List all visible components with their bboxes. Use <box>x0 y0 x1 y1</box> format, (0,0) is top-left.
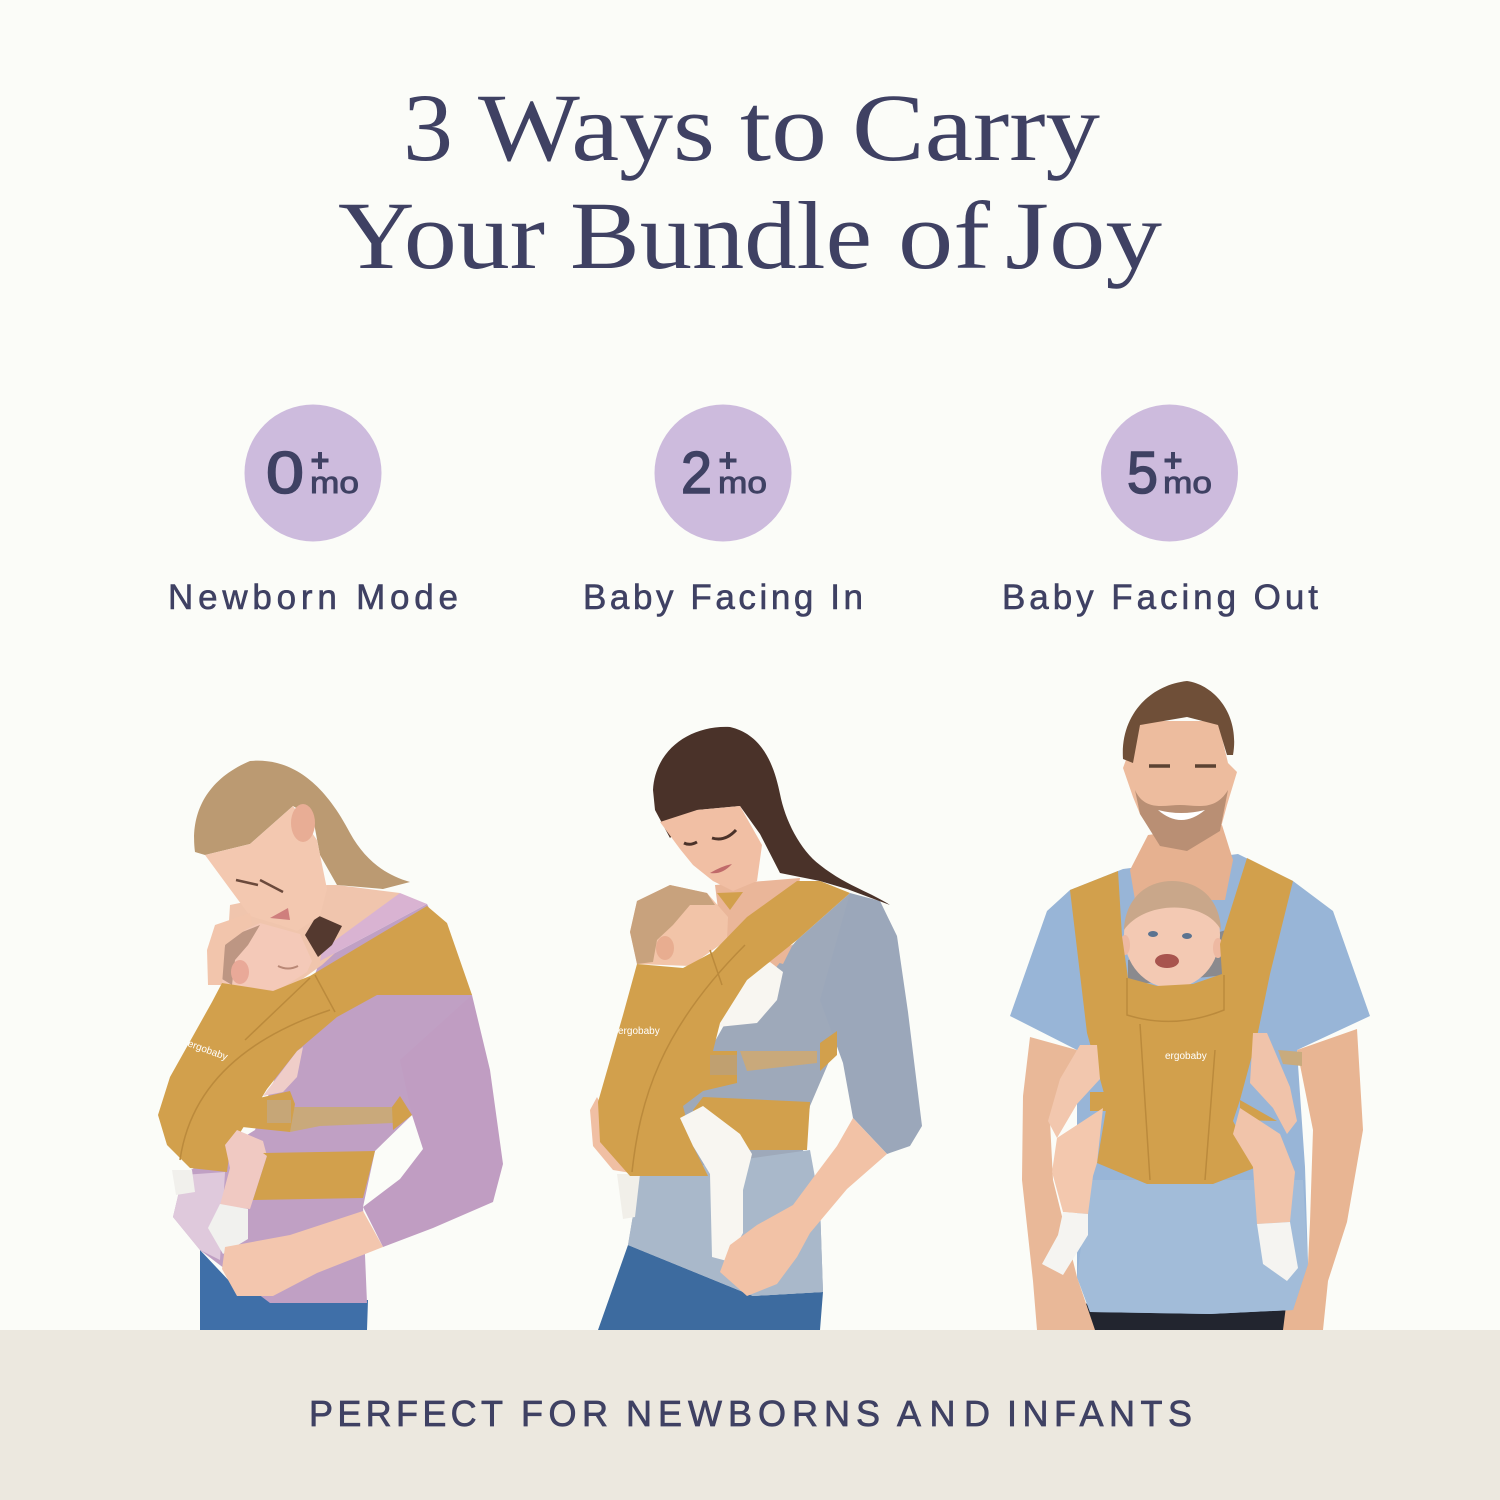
hair <box>653 727 890 905</box>
age badge: 5+ months: mo <box>1163 465 1212 500</box>
carrier logo: ergobaby <box>1165 1051 1207 1062</box>
footer band <box>0 1330 1500 1500</box>
baby's grey suit behind face <box>1128 930 1226 985</box>
carrier logo: ergobaby <box>618 1026 660 1037</box>
photo: mother carrying newborn <box>158 761 503 1330</box>
photo: father carrying baby facing out <box>1010 681 1370 1330</box>
t-shirt <box>1010 854 1370 1314</box>
footer text: AND <box>897 1393 990 1434</box>
label: Baby Facing Out: Baby Facing Out <box>1002 578 1318 617</box>
neck <box>1130 825 1233 900</box>
face <box>205 806 327 931</box>
footer text: FOR <box>521 1393 608 1434</box>
age badge: 0+ months: mo <box>310 465 359 500</box>
title <box>338 74 1162 289</box>
footer text <box>309 1393 1192 1434</box>
hair <box>194 761 410 889</box>
age badge: 2+ months <box>654 404 792 542</box>
baby legs <box>1052 1108 1103 1214</box>
label: Baby Facing In: Baby Facing In <box>583 578 863 617</box>
carrier waist belt <box>253 1151 375 1200</box>
footer text: PERFECT <box>309 1393 503 1434</box>
title: to <box>740 74 827 181</box>
baby white arm and hand <box>718 962 783 1027</box>
age badge: 2+ months: mo <box>718 465 767 500</box>
sweater arm <box>820 893 922 1154</box>
age badge: 0+ months: 0 <box>266 440 304 506</box>
age badge: 0+ months <box>244 404 382 542</box>
stubble <box>1135 790 1228 851</box>
hand on baby's head <box>207 913 252 985</box>
jeans <box>598 1245 823 1330</box>
carrier <box>598 881 850 1176</box>
baby torso <box>263 1047 303 1096</box>
baby far foot <box>617 1174 640 1219</box>
trousers <box>1077 1302 1307 1330</box>
man's hair <box>1123 681 1234 763</box>
strap, buckle and side tab <box>740 1051 817 1071</box>
face <box>660 806 762 891</box>
carrier waist belt <box>693 1097 810 1150</box>
smile <box>1158 810 1205 820</box>
man's eyes <box>1149 764 1216 768</box>
title: of <box>898 182 990 289</box>
carrier <box>1070 858 1293 1184</box>
baby socks <box>1042 1212 1088 1275</box>
title: Ways <box>478 74 715 181</box>
neck and chest <box>715 878 800 975</box>
baby leg and sock <box>220 1130 267 1209</box>
dark hair under chin <box>305 915 342 957</box>
footer text: INFANTS <box>1007 1393 1192 1434</box>
carrier side straps <box>1278 1050 1302 1066</box>
closed eye and lips <box>236 880 283 892</box>
age badge: 5+ months <box>1101 404 1238 542</box>
age badge: 2+ months: 2 <box>681 440 712 506</box>
mother's arm and hand <box>222 1211 383 1296</box>
jeans <box>200 1250 368 1330</box>
mother's supporting hand <box>590 1097 637 1174</box>
baby arms <box>1048 1045 1100 1138</box>
strap, buckle and side tab <box>290 1107 393 1132</box>
baby white leg <box>680 1106 752 1261</box>
ear <box>291 804 315 842</box>
title: Carry <box>852 74 1100 181</box>
age badge: 5+ months: 5 <box>1127 440 1158 506</box>
baby head <box>1124 882 1220 988</box>
carrier logo: ergobaby <box>186 1038 229 1063</box>
title: 3 <box>403 74 453 181</box>
face <box>1123 721 1237 850</box>
sweater torso <box>173 904 472 1303</box>
neck and chest <box>225 885 400 995</box>
carrier <box>158 906 472 1172</box>
title: Your <box>338 182 545 289</box>
sweater arm <box>363 995 503 1247</box>
title: Bundle <box>570 182 872 289</box>
sweater torso <box>628 893 850 1296</box>
mother's forearm and hand <box>720 1118 887 1296</box>
title: Joy <box>1005 182 1162 289</box>
photo: mother carrying baby facing in <box>590 727 922 1330</box>
label: Newborn Mode: Newborn Mode <box>168 578 458 617</box>
footer text: NEWBORNS <box>626 1393 880 1434</box>
baby head <box>217 923 312 991</box>
man's arms <box>1022 1037 1095 1330</box>
baby head <box>630 885 728 966</box>
